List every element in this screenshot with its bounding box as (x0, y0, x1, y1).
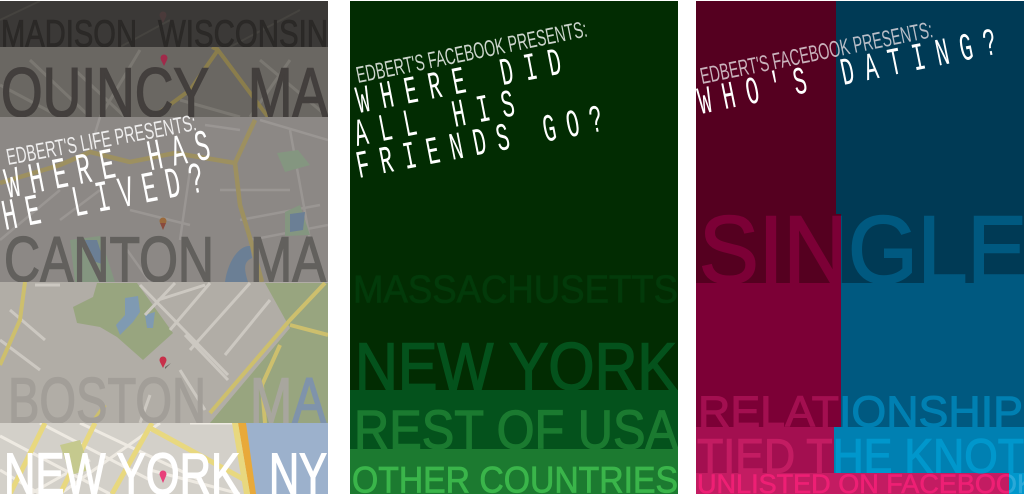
block: upper left (696, 1, 836, 283)
band: Boston MA (0, 282, 328, 436)
title: where did all his friends go (354, 50, 600, 178)
title: where has he lived: HE LIVED? (0, 154, 208, 243)
band: Canton MA (0, 117, 328, 296)
title: where did all his friends go: WHERE DID (353, 43, 565, 125)
panel: who's dating (695, 1, 1024, 494)
panel: where has he lived (0, 1, 328, 494)
band: rest of USA (350, 390, 678, 449)
title: who's dating: WHO'S DATING? (695, 23, 1001, 126)
band: other countries (350, 449, 678, 494)
text: Edbert's Facebook presents: EDBERT'S FACEBOOK PRESENTS: (698, 16, 935, 89)
panel: where did all his friends go (350, 1, 678, 494)
block: single lower (696, 283, 1024, 427)
icon: map pin Boston (160, 356, 171, 369)
label: relationship: RELATIONSHIP (698, 388, 1023, 436)
block: upper right (836, 1, 1024, 283)
icon: map pin New York (160, 470, 166, 483)
icon: map pin Canton (160, 218, 166, 230)
band: Boston MA: MA (250, 364, 326, 436)
label: Massachusetts: MASSACHUSETTS (353, 268, 678, 312)
band: Quincy MA: MA (248, 54, 328, 132)
band: Canton MA: CANTON (4, 224, 214, 296)
band: Madison Wisconsin: MADISON (1, 14, 137, 56)
title: where did all his friends go: FRIENDS GO? (353, 100, 607, 190)
block: relationship lower (696, 427, 1024, 473)
band: Madison Wisconsin: WISCONSIN (158, 14, 328, 56)
icon: map pin Madison (160, 12, 166, 23)
icon: map pin Quincy (160, 54, 168, 66)
text: Edbert's Facebook presents: EDBERT'S FACEBOOK PRESENTS: (354, 16, 589, 88)
text: Edbert's life presents: EDBERT'S LIFE PRESENTS: (4, 109, 198, 170)
band: Boston MA: BOSTON (8, 364, 206, 436)
label: Rest of USA: REST OF USA (354, 398, 678, 460)
title: where has he lived: WHERE HAS (1, 122, 215, 211)
band: Madison Wisconsin (0, 1, 328, 47)
label: New York: NEW YORK (355, 330, 677, 404)
block: tied the knot lower (696, 473, 1024, 494)
band: Canton MA: MA (250, 224, 326, 296)
title: where did all his friends go: ALL HIS (351, 85, 519, 158)
band: Quincy MA: QUINCY (1, 54, 209, 132)
band: Quincy MA (0, 47, 328, 117)
